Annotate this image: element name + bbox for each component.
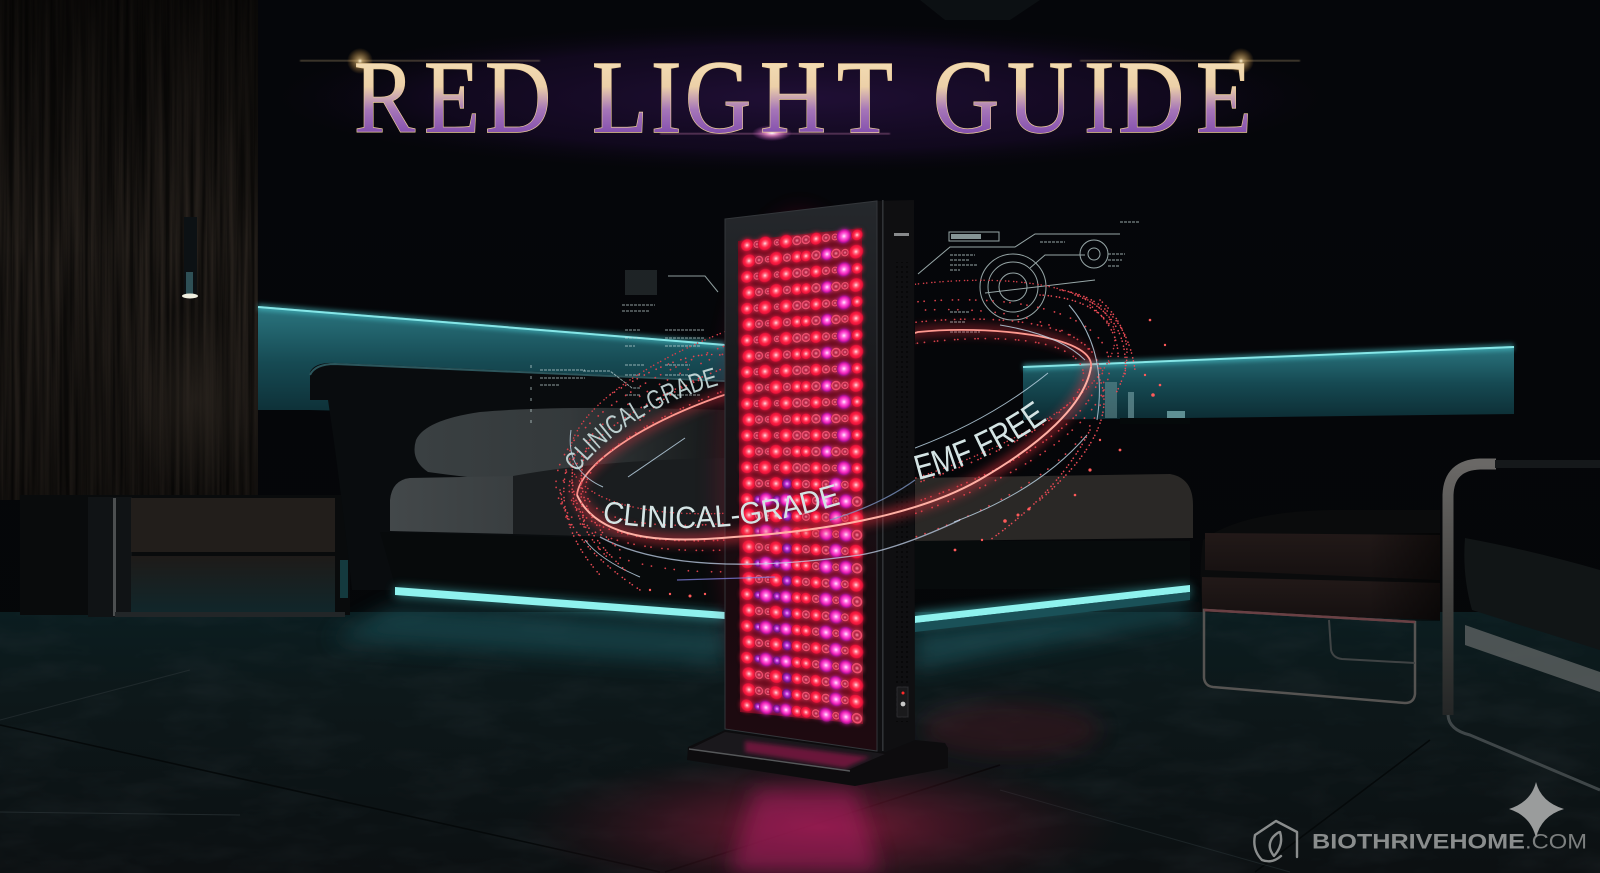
- wordmark: [1312, 830, 1587, 854]
- left cyan wall light: [258, 306, 725, 420]
- wordmark: BIOTHRIVEHOME: [1312, 830, 1525, 854]
- left LED floor strip: [395, 587, 725, 620]
- holographic HUD left: [531, 270, 718, 425]
- bed headboard: [310, 363, 725, 600]
- wood wall panel: [0, 0, 258, 500]
- armchair: [1448, 460, 1600, 790]
- wordmark: .COM: [1525, 830, 1587, 854]
- LED panel: [738, 227, 863, 726]
- title halo: [270, 23, 1330, 173]
- floating label: clinical-grade upper: CLINICAL-GRADE: [566, 368, 718, 470]
- watermark: Biothrivehome logo: [1254, 782, 1587, 861]
- device base: [687, 730, 948, 786]
- right LED floor strip: [915, 585, 1190, 632]
- pendant lamp: [182, 217, 198, 298]
- holographic HUD right: [918, 222, 1140, 332]
- floor: [0, 600, 1600, 873]
- title text: [354, 41, 1252, 155]
- ottoman: [1200, 510, 1440, 703]
- light therapy panel device: [687, 200, 948, 786]
- device glow: [715, 210, 885, 750]
- mattress: [380, 458, 1193, 606]
- red floor reflection: [520, 702, 1120, 873]
- back particles: [555, 280, 1116, 573]
- orbit lines: [570, 305, 1099, 577]
- ring back half: [555, 280, 1116, 578]
- title text: RED: [354, 41, 551, 155]
- front particles: [560, 290, 1135, 590]
- ring front half: [560, 290, 1166, 598]
- device front frame: [725, 201, 877, 751]
- power switch: [897, 687, 908, 717]
- front orbit lines: [600, 480, 960, 580]
- icon: house and leaf: [1254, 821, 1297, 861]
- pillow: [414, 408, 725, 482]
- title flares: [300, 48, 1300, 141]
- icon: sparkle: [1509, 782, 1564, 838]
- nightstand: [20, 495, 350, 617]
- title: [270, 23, 1330, 173]
- device side: [877, 200, 915, 752]
- floating label: clinical-grade lower: CLINICAL-GRADE: [604, 484, 840, 528]
- title text: LIGHT: [592, 41, 893, 155]
- scattered sparks: [649, 319, 1166, 598]
- right cyan wall light: [1023, 346, 1514, 424]
- floating label: EMF free: EMF FREE: [914, 400, 1047, 480]
- title text: GUIDE: [933, 41, 1252, 155]
